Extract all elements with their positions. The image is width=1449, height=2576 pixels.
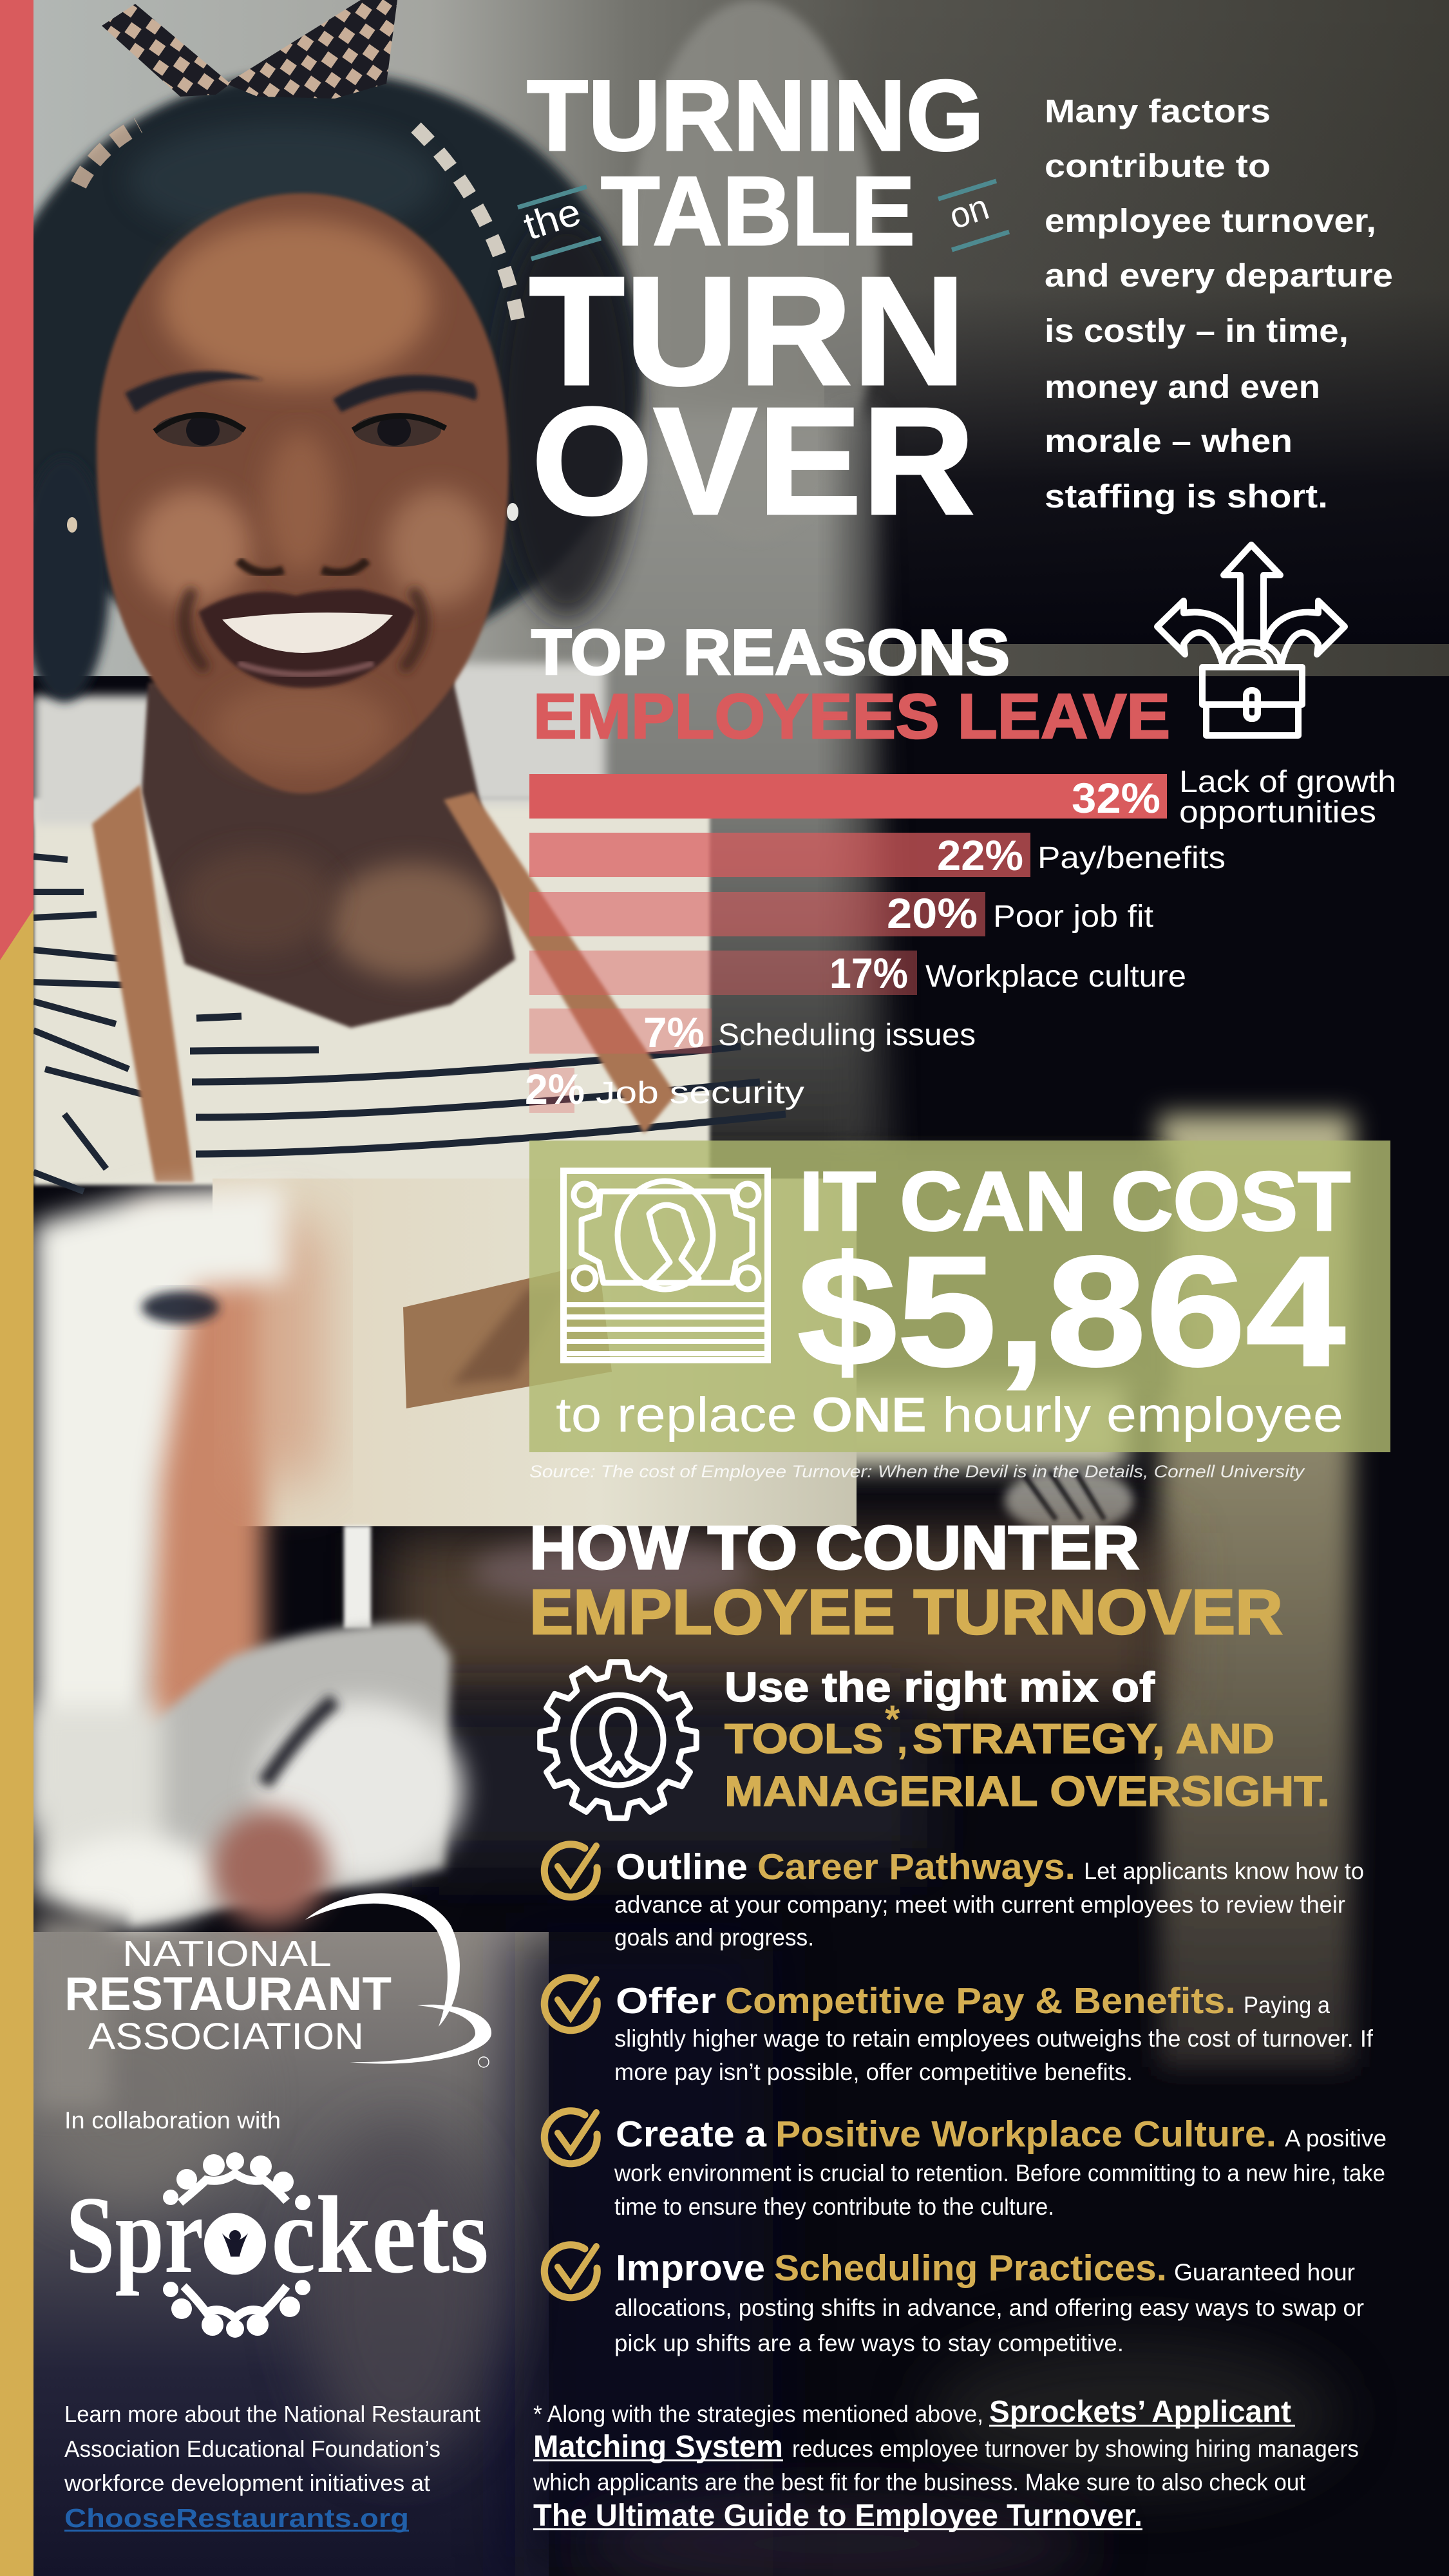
photo: neck and chest: [142, 670, 515, 1028]
bar: 32% lack of growth opportunities: 32%: [1072, 774, 1160, 822]
bar: 2% job security: Job security: [596, 1076, 804, 1110]
tip: create a positive workplace culture: time to ensure they contribute to the culture.: [614, 2193, 1054, 2220]
bar: 7% scheduling issues: [529, 1009, 976, 1056]
tip: outline career pathways: Career Pathways.: [757, 1846, 1075, 1888]
heading: how to counter employee turnover: EMPLOYEE TURNOVER: [529, 1577, 1283, 1647]
logo: national restaurant association: ASSOCIATION: [88, 2016, 364, 2058]
subheading: right mix of tools, strategy and oversight: MANAGERIAL OVERSIGHT.: [724, 1767, 1330, 1815]
title: Turning the Table on Turnover: [518, 60, 1009, 547]
bar: 17% workplace culture: 17%: [829, 949, 908, 997]
panel: cost of replacing an hourly employee: hourly employee: [942, 1388, 1343, 1443]
heading: top reasons employees leave: EMPLOYEES LEAVE: [533, 681, 1170, 752]
tip: create a positive workplace culture: [544, 2111, 1387, 2220]
tip: outline career pathways: advance at your company; meet with current employees to review their: [614, 1891, 1345, 1918]
tip: outline career pathways: goals and progress.: [614, 1924, 814, 1951]
tip: outline career pathways: Let applicants know how to: [1084, 1858, 1364, 1884]
photo: patterned head scarf and bow: [79, 0, 518, 322]
bar: 7% scheduling issues: 7%: [643, 1009, 705, 1056]
text: learn more link: workforce development initiatives at: [64, 2470, 430, 2496]
text: in collaboration with: In collaboration with: [64, 2107, 281, 2134]
tip: improve scheduling practices: [544, 2245, 1364, 2356]
bar: 32% lack of growth opportunities: opportunities: [1179, 795, 1376, 829]
tip: offer competitive pay and benefits: Paying a: [1244, 1992, 1330, 2018]
photo: hair: [0, 71, 641, 702]
bar: 2% job security: 2%: [525, 1065, 585, 1113]
logo: sprockets: Spr: [66, 2174, 204, 2297]
title: Turning the Table on Turnover: the: [518, 189, 586, 248]
subheading: right mix of tools, strategy and oversight: [724, 1663, 1330, 1815]
tip: offer competitive pay and benefits: more pay isn’t possible, offer competitive benefits.: [614, 2059, 1133, 2085]
footnote: sprockets applicant matching system: Sprockets’ Applicant: [989, 2395, 1291, 2429]
tip: offer competitive pay and benefits: [544, 1978, 1374, 2085]
photo: apron front and pocket: [213, 1179, 857, 1526]
tip: improve scheduling practices: pick up shifts are a few ways to stay competitive.: [614, 2330, 1124, 2356]
tip: offer competitive pay and benefits: Competitive Pay & Benefits.: [725, 1980, 1236, 2022]
logo: national restaurant association: NATIONAL: [122, 1933, 332, 1975]
footnote: sprockets applicant matching system: Matching System: [533, 2430, 783, 2464]
footnote: sprockets applicant matching system: which applicants are the best fit for the business. Make sure to also check out: [533, 2469, 1306, 2496]
tip: improve scheduling practices: Guaranteed hour: [1174, 2259, 1355, 2286]
panel: cost of replacing an hourly employee: $5,864: [797, 1224, 1345, 1399]
heading: top reasons employees leave: [531, 616, 1170, 752]
intro paragraph: Many factors: [1045, 93, 1271, 129]
text: learn more link: Learn more about the National Restaurant: [64, 2401, 480, 2427]
icon: gold check mark: [544, 1978, 597, 2031]
title: Turning the Table on Turnover: OVER: [531, 376, 975, 547]
intro paragraph: money and even: [1045, 368, 1320, 405]
icon: gear with person: [540, 1662, 697, 1819]
footnote: sprockets applicant matching system: [533, 2395, 1359, 2533]
tip: improve scheduling practices: Improve: [616, 2248, 765, 2289]
panel: cost of replacing an hourly employee: IT CAN COST: [799, 1154, 1350, 1248]
intro paragraph: employee turnover,: [1045, 202, 1376, 239]
panel: cost of replacing an hourly employee: ONE: [811, 1388, 927, 1443]
tip: create a positive workplace culture: Create a: [616, 2114, 767, 2155]
icon: gold check mark: [544, 2111, 597, 2164]
bar chart: top reasons employees leave: [525, 765, 1396, 1113]
tip: create a positive workplace culture: Positive Workplace Culture.: [775, 2114, 1276, 2155]
text: learn more link: [64, 2401, 480, 2533]
photo: shirt with stripes: [33, 663, 786, 1191]
tip: offer competitive pay and benefits: slightly higher wage to retain employees outweighs the cost of turnover. If: [614, 2025, 1374, 2052]
bar: 22% pay and benefits: [529, 831, 1226, 879]
intro paragraph: and every departure: [1045, 257, 1393, 294]
tip: create a positive workplace culture: A positive: [1285, 2125, 1387, 2152]
tip: create a positive workplace culture: work environment is crucial to retention. Before committing to a new hire, take: [614, 2160, 1385, 2186]
title: Turning the Table on Turnover: TABLE: [601, 156, 915, 266]
icon: gold check mark: [544, 1844, 597, 1897]
heading: how to counter employee turnover: [529, 1513, 1283, 1647]
bar: 7% scheduling issues: Scheduling issues: [718, 1018, 976, 1052]
bar: 22% pay and benefits: 22%: [937, 831, 1023, 879]
intro paragraph: morale – when: [1045, 422, 1293, 459]
bar: 20% poor job fit: 20%: [887, 889, 978, 937]
text: learn more link: Association Educational Foundation’s: [64, 2436, 440, 2462]
title: Turning the Table on Turnover: TURNING: [527, 60, 984, 172]
subheading: right mix of tools, strategy and oversight: ,: [896, 1715, 908, 1762]
logo: national restaurant association: RESTAURANT: [64, 1968, 392, 2020]
photo: apron straps: [92, 784, 676, 1182]
bar: 22% pay and benefits: Pay/benefits: [1037, 841, 1226, 875]
tip: outline career pathways: [544, 1844, 1364, 1951]
bar: 32% lack of growth opportunities: [529, 765, 1396, 829]
footnote: sprockets applicant matching system: The Ultimate Guide to Employee Turnover.: [533, 2499, 1142, 2533]
text: learn more link: ChooseRestaurants.org: [64, 2503, 409, 2533]
tip: offer competitive pay and benefits: Offer: [616, 1980, 716, 2022]
panel: cost of replacing an hourly employee: [529, 1141, 1390, 1452]
subheading: right mix of tools, strategy and oversight: STRATEGY, AND: [913, 1715, 1274, 1762]
footnote: sprockets applicant matching system: * Along with the strategies mentioned above,: [533, 2401, 983, 2427]
logo: sprockets: [66, 2152, 489, 2338]
footnote: sprockets applicant matching system: reduces employee turnover by showing hiring managers: [792, 2436, 1359, 2462]
photo: face: [67, 193, 518, 793]
bar: 2% job security: [525, 1065, 804, 1113]
subheading: right mix of tools, strategy and oversight: TOOLS: [724, 1715, 884, 1762]
tip: outline career pathways: Outline: [616, 1846, 748, 1888]
panel: cost of replacing an hourly employee: to replace: [556, 1388, 797, 1443]
icon: arrows leaving a briefcase: [1157, 545, 1345, 735]
heading: top reasons employees leave: TOP REASONS: [531, 616, 1010, 688]
bar: 20% poor job fit: Poor job fit: [993, 900, 1153, 934]
left colour strip: red and gold: [0, 0, 33, 2576]
intro paragraph: is costly – in time,: [1045, 312, 1349, 349]
tip: improve scheduling practices: Scheduling Practices.: [774, 2248, 1167, 2289]
intro paragraph: staffing is short.: [1045, 478, 1328, 515]
title: Turning the Table on Turnover: on: [944, 186, 994, 236]
intro paragraph: contribute to: [1045, 147, 1271, 184]
subheading: right mix of tools, strategy and oversight: *: [885, 1698, 900, 1741]
bar: 17% workplace culture: Workplace culture: [925, 960, 1186, 994]
title: Turning the Table on Turnover: TURN: [529, 245, 966, 418]
bar: 32% lack of growth opportunities: Lack of growth: [1179, 765, 1396, 799]
source line: Source: The cost of Employee Turnover: When the Devil is in the Details, Cornell University: [529, 1462, 1305, 1481]
icon: gold check mark: [544, 2245, 597, 2298]
icon: dollar bill stack: [564, 1171, 768, 1360]
logo: sprockets: ckets: [271, 2174, 489, 2297]
heading: how to counter employee turnover: HOW TO COUNTER: [529, 1513, 1139, 1582]
bar: 20% poor job fit: [529, 889, 1153, 937]
photo: blurred hand and cup: [33, 1185, 464, 2109]
intro paragraph: [1045, 93, 1393, 515]
bar: 17% workplace culture: [529, 949, 1186, 997]
logo: national restaurant association: [64, 1893, 491, 2067]
tip: improve scheduling practices: allocations, posting shifts in advance, and offering easy ways to swap or: [614, 2295, 1364, 2321]
subheading: right mix of tools, strategy and oversight: Use the right mix of: [724, 1663, 1155, 1710]
